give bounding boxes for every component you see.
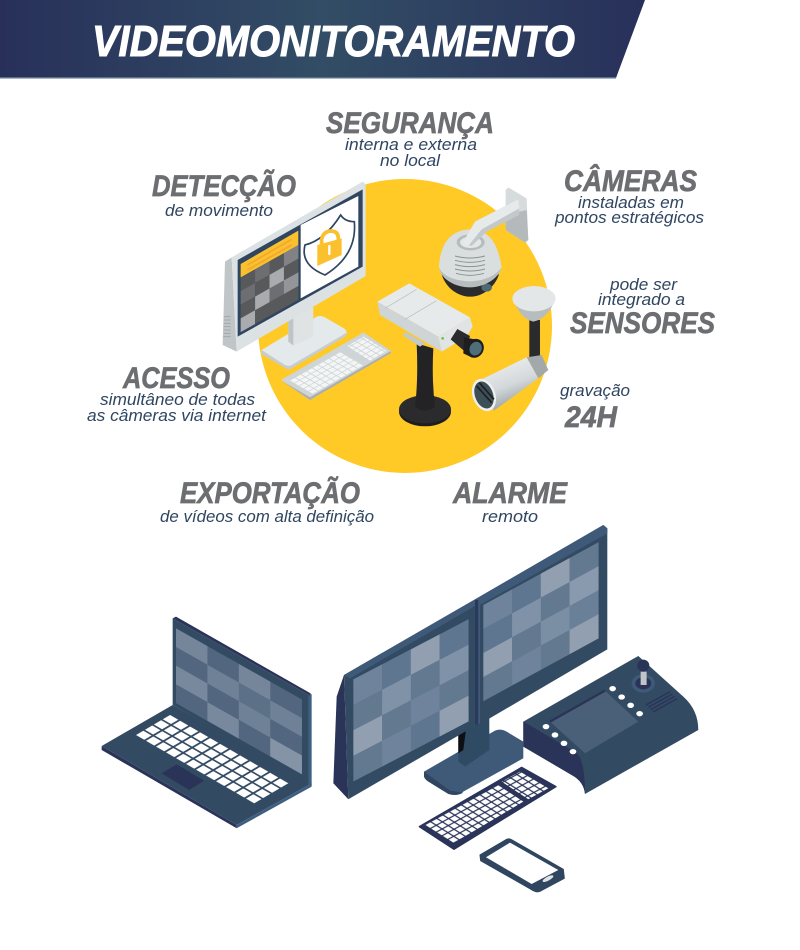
- label: câmeras: instaladas em: [578, 194, 684, 212]
- icon: shield with padlock: [304, 215, 355, 275]
- label: acesso: [87, 362, 267, 425]
- label: exportação: EXPORTAÇÃO: [180, 476, 360, 510]
- icon: laptop: [102, 617, 312, 828]
- laptop keys: [134, 714, 290, 804]
- label: 24h: gravação: [560, 382, 630, 400]
- control panel with joystick: [523, 656, 698, 794]
- icon: sensor: [512, 286, 556, 362]
- label: exportação: de vídeos com alta definição: [160, 508, 374, 526]
- icon: bullet camera: [468, 355, 548, 415]
- label: detecção: de movimento: [165, 202, 273, 220]
- laptop trackpad: [162, 764, 204, 790]
- icon: box camera on stand: [377, 283, 487, 426]
- keyboard: [282, 333, 391, 400]
- title: VIDEOMONITORAMENTO: [92, 17, 575, 66]
- stand: [424, 717, 523, 795]
- label: sensores: SENSORES: [570, 307, 715, 340]
- label: câmeras: pontos estratégicos: [554, 209, 704, 227]
- label: alarme: ALARME: [452, 477, 568, 510]
- label: câmeras: [554, 164, 704, 227]
- label: segurança: [326, 107, 494, 170]
- title banner: [0, 0, 645, 78]
- monitor body: [223, 182, 366, 352]
- label: alarme: remoto: [482, 508, 538, 526]
- smartphone: [480, 839, 564, 892]
- label: segurança: interna e externa: [345, 136, 477, 154]
- monitor keyboard: [419, 767, 556, 849]
- label: câmeras: CÂMERAS: [564, 164, 697, 198]
- label: detecção: [152, 169, 296, 220]
- monitor stand and base: [262, 307, 347, 369]
- label: exportação: [160, 476, 374, 526]
- laptop screen grid: [176, 628, 302, 774]
- label: detecção: DETECÇÃO: [152, 169, 296, 203]
- label: sensores: integrado a: [598, 291, 685, 309]
- label: segurança: SEGURANÇA: [326, 107, 494, 140]
- icon: dome camera: [439, 187, 528, 297]
- label: alarme: [452, 477, 568, 526]
- label: acesso: simultâneo de todas: [100, 391, 255, 409]
- icon: security cameras and sensor: [377, 187, 556, 426]
- label: acesso: ACESSO: [122, 362, 230, 395]
- label: segurança: no local: [380, 152, 441, 170]
- icon: desktop monitor with shield: [223, 182, 391, 400]
- monitor camera grid: [241, 245, 298, 332]
- right monitor: [475, 525, 607, 725]
- icon: dual monitor workstation: [333, 525, 698, 892]
- label: 24h: 24H: [564, 401, 618, 434]
- left monitor: [333, 599, 478, 799]
- monitor yellow header: [241, 231, 298, 277]
- label: 24h: [560, 382, 630, 434]
- label: sensores: [570, 276, 715, 340]
- label: acesso: as câmeras via internet: [87, 407, 267, 425]
- yellow circle: [258, 179, 552, 473]
- label: sensores: pode ser: [609, 276, 679, 294]
